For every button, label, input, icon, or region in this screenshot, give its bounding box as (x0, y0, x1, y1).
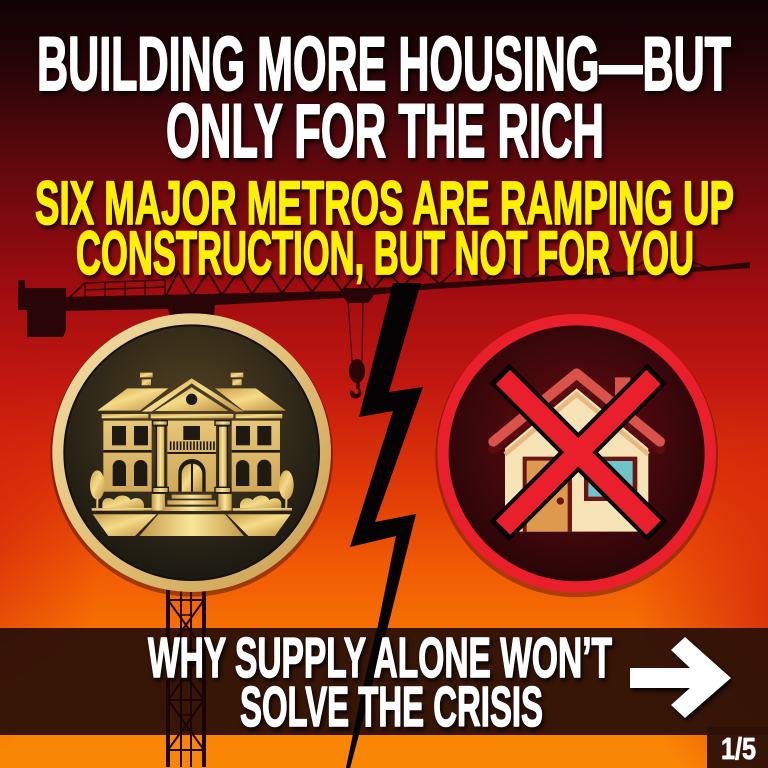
icon: gardens and trees (90, 470, 294, 536)
crane jib and counterweight (18, 261, 750, 398)
title (37, 22, 731, 174)
page badge (707, 727, 768, 768)
crossed-out house badge (435, 314, 718, 597)
bottom band (0, 628, 768, 735)
arrow (630, 637, 731, 718)
call to action text (148, 626, 612, 739)
gold mansion badge (50, 313, 333, 597)
subtitle (35, 169, 734, 287)
icon: house (493, 373, 660, 532)
call to action text: SOLVE THE CRISIS (240, 675, 543, 739)
icon: mansion (90, 373, 294, 536)
lightning bolt divider (346, 283, 423, 768)
lightning bolt tail over band (346, 628, 387, 768)
crane mast (168, 585, 204, 767)
icon: red X (499, 373, 657, 531)
crane counterweight (18, 280, 66, 337)
crane jib (60, 261, 750, 315)
crane hook (343, 288, 373, 398)
page badge: 1/5 (721, 731, 756, 766)
